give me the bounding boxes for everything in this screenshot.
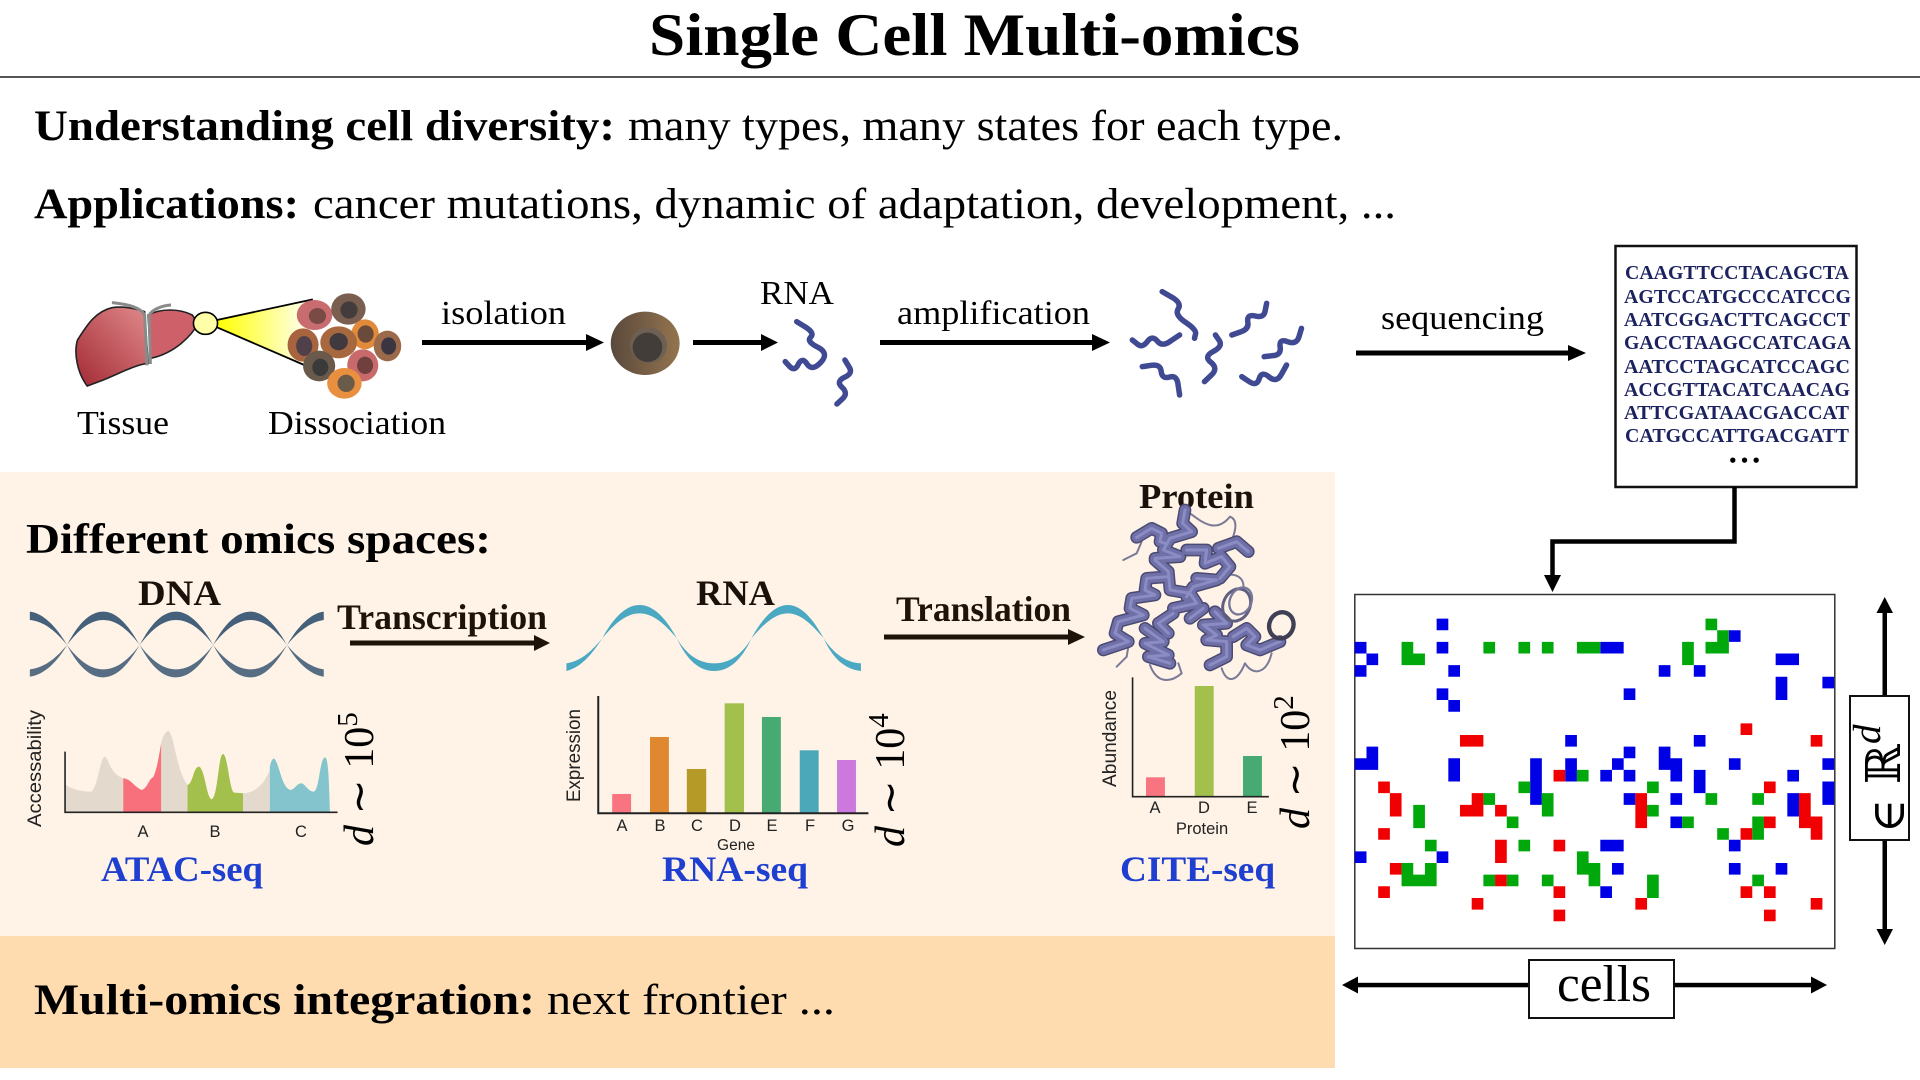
label: CITE dimension: 2 (1268, 695, 1300, 710)
chart: ATAC-seq accessibility: B (209, 823, 221, 841)
icon: liver with magnified circle (76, 299, 313, 386)
chart: ATAC-seq accessibility (25, 709, 338, 841)
label: translation: Translation (896, 589, 1071, 629)
label: ATAC dimension: 5 (332, 712, 364, 727)
arrow: sequencing (1356, 345, 1586, 361)
label: dissociation: Dissociation (268, 405, 446, 442)
label: isolation: isolation (441, 295, 566, 332)
label: feature space box: ℝ (1856, 744, 1912, 784)
title: Single Cell Multi-omics (649, 2, 1300, 68)
label: RNA (omics): RNA (696, 573, 775, 613)
text: understanding cell diversity (34, 103, 1343, 150)
arrow: translation (884, 629, 1085, 645)
icon: dissociated cells (288, 293, 401, 399)
label: cells box (1529, 956, 1674, 1018)
panel: sequence reads box: GACCTAAGCCATCAGA (1624, 333, 1851, 354)
label: feature space box: d (1846, 724, 1889, 744)
chart: CITE-seq abundance bars: Abundance (1100, 690, 1121, 787)
chart: RNA-seq expression bars: G (842, 817, 854, 835)
panel: sequence reads box: AATCGGACTTCAGCCT (1624, 310, 1850, 331)
label: sequencing: sequencing (1381, 300, 1544, 337)
chart: RNA-seq expression bars: B (654, 817, 666, 835)
label: tissue: Tissue (77, 405, 169, 442)
icon: RNA strands (785, 322, 850, 404)
label: CITE dimension: d ∼ 10 (1273, 710, 1319, 829)
arrow: amplification (880, 334, 1110, 351)
chart: ATAC-seq accessibility: A (137, 823, 149, 841)
panel: multi-omics integration: Multi-omics integration: (34, 977, 535, 1024)
chart: RNA-seq expression bars: A (616, 817, 628, 835)
panel: sequence reads box (1616, 246, 1856, 487)
chart: CITE-seq abundance bars: Protein (1176, 820, 1228, 838)
icon: amplified RNA strands (1132, 292, 1301, 395)
chart: RNA-seq expression bars: Gene (717, 837, 755, 854)
text: understanding cell diversity: many types, many states for each type. (628, 103, 1343, 150)
label: protein (omics): Protein (1139, 477, 1254, 516)
arrow: horizontal cells axis (1342, 976, 1827, 994)
chart: ATAC-seq accessibility: Accessability (25, 709, 46, 827)
icon: DNA double helix (30, 612, 324, 677)
label: RNA: RNA (760, 275, 834, 312)
label: amplification: amplification (897, 295, 1090, 332)
heading: different omics spaces: Different omics spaces: (26, 517, 491, 563)
label: transcription: Transcription (337, 597, 547, 637)
arrow: cell to RNA (693, 334, 778, 351)
chart: CITE-seq abundance bars: E (1246, 799, 1258, 817)
panel: sequence reads box: AGTCCATGCCCATCCG (1624, 287, 1851, 308)
panel: sequence reads box: ••• (1728, 452, 1761, 470)
label: RNA-seq: RNA-seq (662, 849, 808, 889)
chart: CITE-seq abundance bars: D (1198, 799, 1210, 817)
panel: multi-omics integration: next frontier ... (547, 977, 835, 1024)
panel: sequence reads box: ACCGTTACATCAACAG (1624, 380, 1850, 401)
chart: ATAC-seq accessibility: C (295, 823, 307, 841)
chart: CITE-seq abundance bars (1100, 677, 1269, 838)
text: applications: Applications: (34, 181, 299, 228)
panel: omics spaces background (0, 472, 1335, 936)
label: ATAC dimension: d ∼ 10 (337, 727, 383, 846)
label: CITE-seq: CITE-seq (1120, 849, 1275, 889)
panel: multi-omics integration (0, 936, 1335, 1068)
chart: RNA-seq expression bars: E (766, 817, 778, 835)
text: understanding cell diversity: Understanding cell diversity: (34, 103, 615, 150)
label: ATAC-seq: ATAC-seq (101, 849, 263, 889)
arrow: isolation (422, 334, 604, 351)
label: RNA dimension: 4 (863, 713, 895, 728)
chart: RNA-seq expression bars (564, 696, 868, 854)
label: feature space box: ∈ (1861, 799, 1915, 833)
label: feature space box (1846, 696, 1915, 840)
label: cells box: cells (1557, 956, 1651, 1013)
text: applications: cancer mutations, dynamic of adaptation, development, ... (313, 181, 1396, 228)
chart: RNA-seq expression bars: C (691, 817, 703, 835)
label: RNA dimension: d ∼ 10 (868, 728, 914, 847)
chart: RNA-seq expression bars: F (805, 817, 815, 835)
panel: sequence reads box: AATCCTAGCATCCAGC (1624, 357, 1850, 378)
arrow: vertical feature axis (1876, 597, 1893, 945)
chart: RNA-seq expression bars: D (729, 817, 741, 835)
arrow: reads to matrix connector (1544, 487, 1734, 592)
icon: isolated cell (611, 312, 680, 375)
chart: sparse cell-by-feature matrix (1355, 594, 1835, 948)
chart: RNA-seq expression bars: Expression (564, 709, 585, 802)
chart: CITE-seq abundance bars: A (1149, 799, 1161, 817)
label: DNA: DNA (138, 573, 221, 613)
panel: sequence reads box: ATTCGATAACGACCAT (1624, 403, 1849, 424)
icon: protein ribbon structure (1103, 510, 1298, 680)
arrow: transcription (350, 635, 550, 651)
panel: sequence reads box: CATGCCATTGACGATT (1625, 426, 1849, 447)
icon: RNA ribbon (566, 605, 861, 671)
panel: sequence reads box: CAAGTTCCTACAGCTA (1625, 263, 1849, 284)
